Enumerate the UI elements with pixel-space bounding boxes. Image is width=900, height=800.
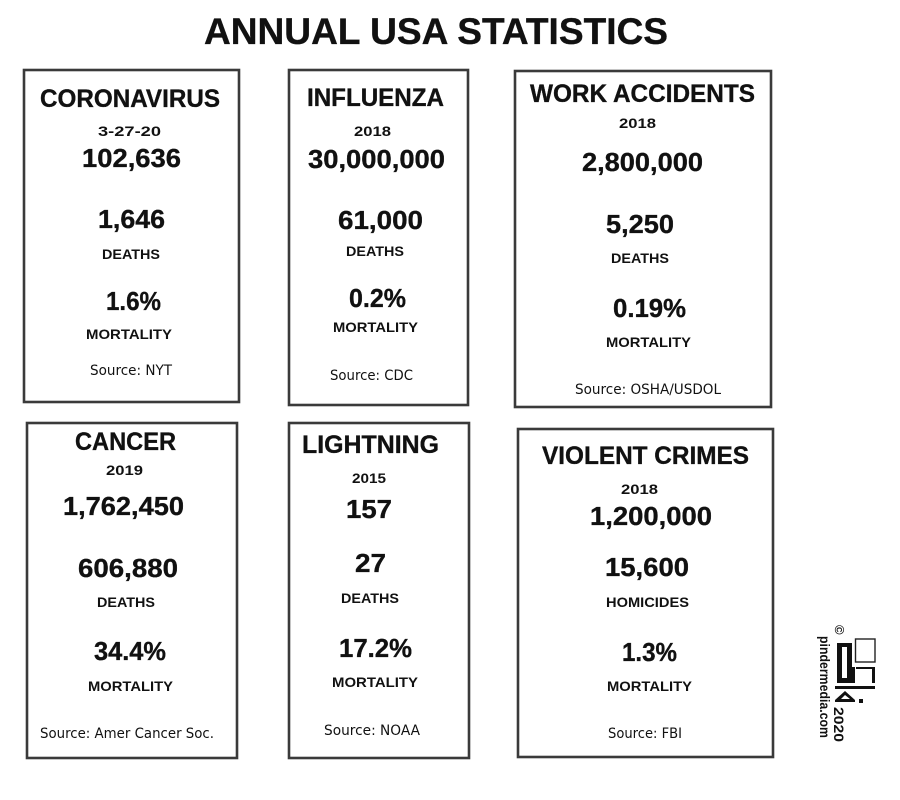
cases: 1,762,450: [63, 491, 184, 521]
website text: pindermedia.com: [817, 636, 833, 738]
source: Source: OSHA/USDOL: [575, 382, 721, 398]
year: 2019: [106, 462, 143, 478]
deaths label: DEATHS: [341, 590, 399, 606]
heading: lightning: LIGHTNING: [302, 431, 439, 459]
panel: cancer: [27, 423, 237, 758]
source: Source: CDC: [330, 368, 413, 384]
panel: lightning: [289, 423, 469, 758]
mortality label: MORTALITY: [606, 334, 692, 350]
panel: coronavirus: [24, 70, 239, 402]
deaths number: 1,646: [98, 204, 165, 234]
year: 2015: [352, 470, 386, 486]
deaths label: DEATHS: [97, 594, 155, 610]
cases: 157: [346, 494, 392, 524]
panel: violent crimes: [518, 429, 773, 757]
deaths number: 5,250: [606, 209, 674, 239]
cases: 2,800,000: [582, 147, 703, 177]
year: 2018: [354, 123, 391, 139]
cases: 30,000,000: [308, 144, 445, 174]
deaths label: DEATHS: [611, 250, 669, 266]
source: Source: NYT: [90, 363, 172, 379]
year text: 2020: [831, 707, 847, 742]
panel: work accidents: [515, 71, 771, 407]
cases: 1,200,000: [590, 501, 712, 531]
year: 2018: [621, 481, 658, 497]
date: 3-27-20: [98, 123, 161, 139]
heading: cancer: CANCER: [75, 428, 176, 456]
title: ANNUAL USA STATISTICS: [204, 11, 668, 52]
source: Source: FBI: [608, 726, 682, 742]
mortality number: 17.2%: [339, 633, 412, 663]
homicides label: HOMICIDES: [606, 594, 689, 610]
copyright symbol: ©: [832, 625, 847, 635]
mortality label: MORTALITY: [607, 678, 693, 694]
mortality label: MORTALITY: [332, 674, 419, 690]
deaths label: DEATHS: [102, 246, 160, 262]
heading: influenza: INFLUENZA: [307, 84, 444, 112]
logo mark: [835, 639, 875, 703]
mortality label: MORTALITY: [86, 326, 173, 342]
deaths number: 61,000: [338, 205, 423, 235]
cases: 102,636: [82, 143, 181, 173]
mortality label: MORTALITY: [88, 678, 174, 694]
deaths label: DEATHS: [346, 243, 404, 259]
source: Source: NOAA: [324, 723, 420, 739]
heading: work accidents: WORK ACCIDENTS: [530, 80, 755, 108]
mortality label: MORTALITY: [333, 319, 419, 335]
mortality number: 0.19%: [613, 293, 686, 323]
year: 2018: [619, 115, 656, 131]
panel: influenza: [289, 70, 468, 405]
mortality number: 34.4%: [94, 636, 166, 666]
homicides number: 15,600: [605, 552, 689, 582]
source: Source: Amer Cancer Soc.: [40, 726, 214, 742]
deaths number: 27: [355, 548, 386, 578]
logo with copyright and website: [817, 625, 875, 742]
heading: violent crimes: VIOLENT CRIMES: [542, 442, 749, 470]
mortality number: 0.2%: [349, 283, 406, 313]
deaths number: 606,880: [78, 553, 178, 583]
heading: coronavirus: CORONAVIRUS: [40, 85, 220, 113]
mortality number: 1.6%: [106, 286, 161, 316]
mortality number: 1.3%: [622, 637, 677, 667]
